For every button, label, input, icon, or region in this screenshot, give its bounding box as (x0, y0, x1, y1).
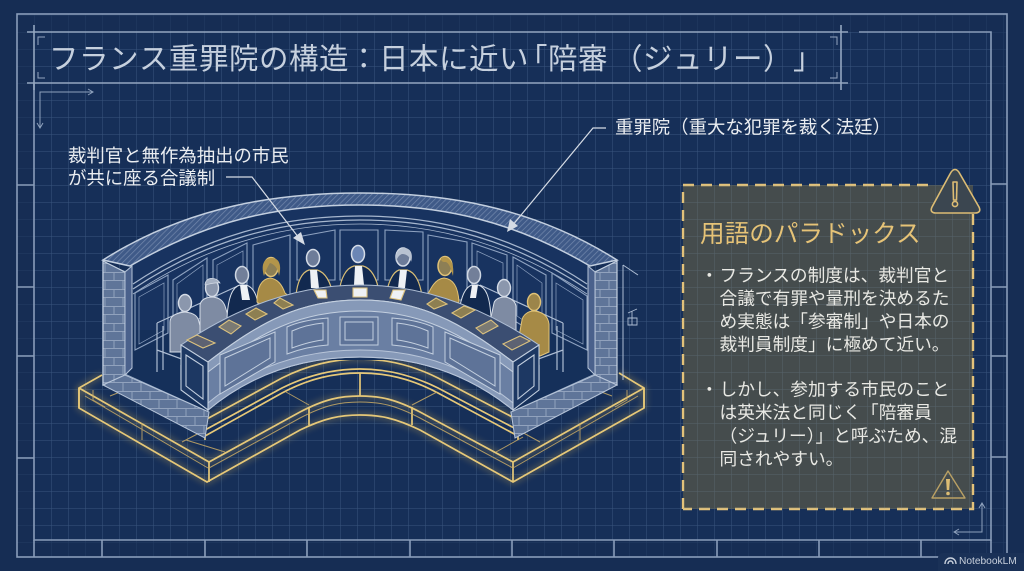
callout: cour d'assises: 重罪院（重大な犯罪を裁く法廷） (615, 116, 891, 138)
title: （ (613, 43, 643, 76)
desk top (181, 285, 539, 362)
NotebookLM badge: NotebookLM (959, 556, 1017, 567)
panel body text: 合議で有罪や量刑を決めるた (720, 288, 949, 308)
judge right outer (459, 266, 491, 322)
right pillar (511, 261, 617, 438)
icon: warning triangle bottom (932, 471, 965, 498)
title: 」 (793, 43, 823, 76)
judges' bench desk (181, 285, 539, 410)
title: 「 (518, 43, 548, 76)
desk end left (181, 345, 208, 410)
panel: terminology paradox (683, 170, 980, 509)
panel body text: フランスの制度は、裁判官と (720, 266, 949, 286)
panel body text: め実態は「参審制」や日本の (720, 312, 949, 332)
desk panels (220, 317, 500, 394)
wall interior (130, 205, 590, 380)
judge left centre (296, 250, 333, 300)
citizen gold man right (518, 294, 549, 356)
title: 陪審 (548, 43, 608, 76)
citizen 2 grey woman (200, 278, 230, 334)
judge left outer (227, 266, 259, 320)
title: フランス重罪院の構造：日本に近い (49, 43, 529, 76)
panel body text (700, 266, 957, 469)
desk rim (208, 300, 513, 372)
panel body text: 裁判員制度」に極めて近い。 (720, 334, 949, 354)
callout: seated panel: 裁判官と無作為抽出の市民 (68, 145, 289, 166)
panel heading: 用語のパラドックス (700, 221, 921, 248)
wall panels (135, 230, 587, 350)
dimension line (623, 265, 638, 380)
corner axis arrows bottom-right (954, 503, 985, 535)
panel body text: （ジュリー）」と呼ぶため、混 (720, 426, 957, 446)
documents on desk (187, 288, 530, 350)
courtroom isometric illustration (79, 193, 644, 482)
judge right centre (386, 248, 422, 300)
floor edges (125, 374, 595, 412)
desk front face (208, 300, 513, 410)
citizen gold woman right (424, 256, 459, 312)
judge centre (339, 246, 379, 296)
panel body text: 同されやすい。 (720, 449, 843, 469)
NotebookLM badge (938, 553, 1024, 571)
floor (125, 330, 595, 412)
icon: warning triangle top (931, 170, 980, 213)
benches (157, 285, 563, 380)
callout: seated panel (68, 145, 305, 245)
left pillar (103, 261, 209, 438)
citizen 1 grey man (170, 294, 204, 352)
panel body text: ・ (700, 266, 718, 286)
corner axis arrows top-left (37, 89, 93, 128)
desk end right (513, 345, 539, 410)
citizen gold woman left (257, 258, 296, 312)
wall cornice lines (133, 216, 587, 294)
panel body text: しかし、参加する市民のこと (720, 380, 949, 400)
citizen grey woman right (490, 280, 516, 332)
title box (27, 25, 848, 90)
title: ジュリー） (643, 43, 793, 76)
callout: cour d'assises (507, 116, 891, 232)
callout: seated panel: が共に座る合議制 (68, 168, 215, 188)
desk lower lip (208, 350, 513, 410)
panel body text: は英米法と同じく「陪審員 (720, 402, 932, 422)
panel body text: ・ (700, 380, 718, 400)
gold foundation (79, 359, 644, 482)
wall cap (103, 193, 617, 266)
